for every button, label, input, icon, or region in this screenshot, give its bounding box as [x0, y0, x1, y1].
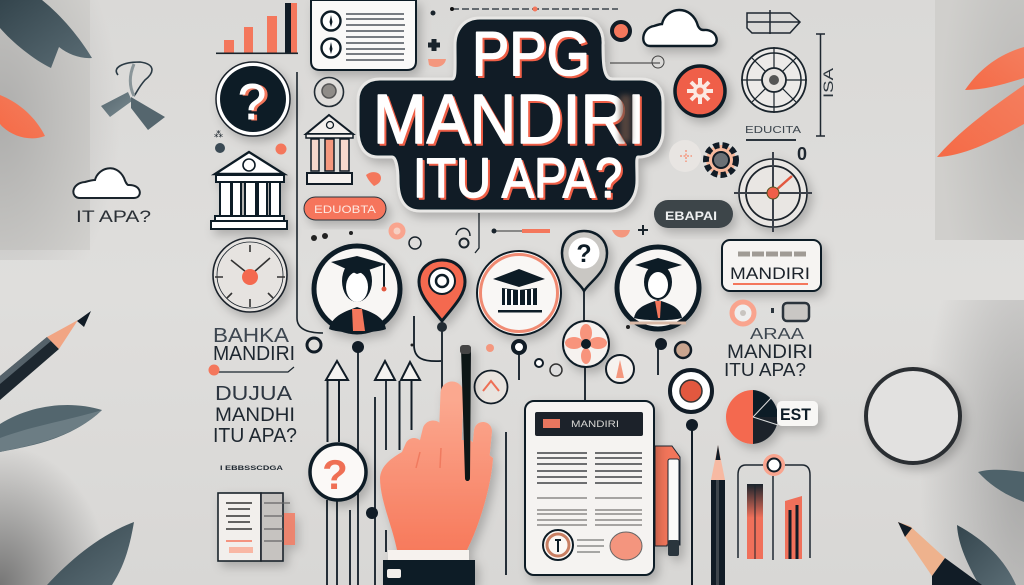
pill: EDUOBTA: EDUOBTA: [314, 204, 377, 216]
icon: pencil right: [711, 445, 725, 585]
title text: MANDIRI: [373, 80, 645, 158]
label: EDUCITA: EDUCITA: [745, 124, 801, 136]
icon: gauge: [213, 238, 287, 312]
title text: PPG: [472, 20, 590, 89]
label: EDUCITA: [745, 124, 801, 140]
icon: hand with pen: [380, 345, 493, 585]
icon: small device: [771, 303, 809, 321]
text block left 2: MANDHI: [215, 405, 295, 426]
pill: EBAPAI: [654, 200, 733, 228]
decorative leaves top left: [0, 0, 92, 138]
icon: map pin: [419, 260, 465, 321]
text block right: [724, 326, 813, 380]
speech bubble question: ?: [576, 240, 592, 268]
icon: outline glyph top right: [747, 10, 800, 34]
icon: flower badge: [563, 321, 609, 367]
pill: EDUOBTA: [304, 197, 386, 220]
icon: coral gear badge: [675, 66, 725, 116]
document header: MANDIRI: [571, 419, 619, 429]
icon: question circle lower: [310, 444, 366, 500]
icon: gear: [706, 144, 807, 175]
icon: dark dot coral centre: [612, 22, 630, 40]
icon: question circle lower: ?: [322, 451, 348, 498]
leaf bottom left: [47, 522, 134, 585]
title text: [373, 20, 647, 211]
connector line left: [297, 72, 323, 333]
text block right: ITU APA?: [724, 360, 806, 380]
temple badge: [477, 251, 561, 335]
document header: [535, 412, 643, 436]
text block right: ARAA: [750, 326, 804, 343]
icon: question circle: ?: [238, 74, 266, 130]
EST tag: EST: [780, 405, 812, 424]
graduate portrait left: [314, 246, 400, 332]
cloud with label: IT APA?: [76, 207, 151, 226]
text block left 2: I EBBSSCDGA: [220, 465, 283, 472]
arrows: [326, 361, 420, 450]
icon: binder clip: [101, 62, 165, 130]
connector lines bottom: [327, 291, 658, 585]
icon: clock: [734, 152, 812, 232]
icon: pale circle: [669, 140, 701, 172]
icon: coral ring: [732, 302, 754, 324]
icon: gear: 0: [797, 144, 807, 164]
icon: marker: [655, 446, 680, 556]
title text: MANDIRI: [375, 82, 647, 160]
text block right: MANDIRI: [727, 342, 813, 363]
icon: pencil bottom right: [898, 522, 982, 585]
dashed line and marks top: [428, 6, 664, 68]
icon: question circle: [216, 62, 290, 136]
title text: PPG: [474, 22, 592, 91]
bracket with rotated label: ISA: [820, 67, 836, 98]
icon: small badge behind hand: [474, 370, 508, 404]
text block left 2: ITU APA?: [213, 425, 297, 447]
text block left 2: [213, 383, 297, 472]
icon: question circle: ?: [241, 75, 269, 131]
panel: top note card: [311, 0, 416, 70]
icon: pencil left: [0, 311, 91, 400]
pie chart: [726, 390, 818, 444]
panel: document MANDIRI: [525, 401, 654, 575]
icon: cloud top right: [643, 10, 717, 46]
icon: target dial: [741, 47, 807, 113]
divider with coral dot: [208, 364, 294, 376]
text block left 1: [213, 325, 295, 365]
bar chart top: [216, 3, 298, 54]
title text: ITU APA?: [413, 146, 622, 209]
text block left 1: BAHKA: [213, 325, 290, 347]
pill: EBAPAI: EBAPAI: [665, 209, 717, 223]
chart bottom right: [738, 454, 810, 560]
title text: ITU APA?: [415, 148, 624, 211]
graduate portrait right: [617, 247, 699, 329]
small dots: ⁂: [214, 129, 223, 139]
icon: magnifying lens: [866, 369, 960, 463]
text block left 2: DUJUA: [215, 383, 293, 405]
leaf left middle: [0, 405, 102, 452]
small dots: [214, 129, 286, 154]
label card: MANDIRI: [722, 240, 821, 291]
label card: MANDIRI: MANDIRI: [730, 264, 810, 283]
icon: small dial: [314, 78, 344, 106]
icon: large temple: [211, 152, 287, 229]
cloud with label: [73, 168, 151, 226]
nodes and dots: [307, 322, 630, 519]
title badge: [358, 18, 663, 211]
bracket with rotated label: [816, 34, 836, 136]
icon: small badge: [606, 355, 634, 383]
speech bubble question: [562, 231, 607, 291]
icon: book: [218, 493, 295, 561]
text block left 1: MANDIRI: [213, 343, 295, 365]
small coral shapes and squiggles: [311, 172, 648, 253]
icon: small temple: [306, 115, 353, 184]
leaves right: [937, 47, 1024, 585]
target marker with stem: [655, 338, 712, 585]
